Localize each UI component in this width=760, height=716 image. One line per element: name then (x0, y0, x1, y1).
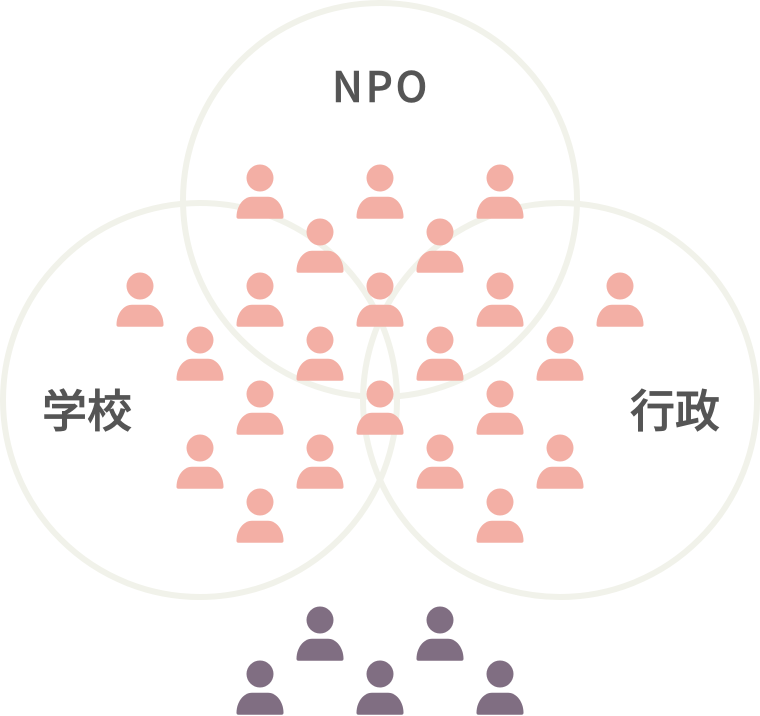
group: people outside circles (236, 606, 524, 715)
label: government: 行政 (630, 375, 720, 440)
label: school: 学校 (42, 375, 132, 440)
circle: NPO (183, 3, 577, 397)
circle: school (3, 203, 397, 597)
circle: government (363, 203, 757, 597)
group: people inside circles (116, 164, 644, 543)
label: NPO: NPO (332, 54, 430, 115)
